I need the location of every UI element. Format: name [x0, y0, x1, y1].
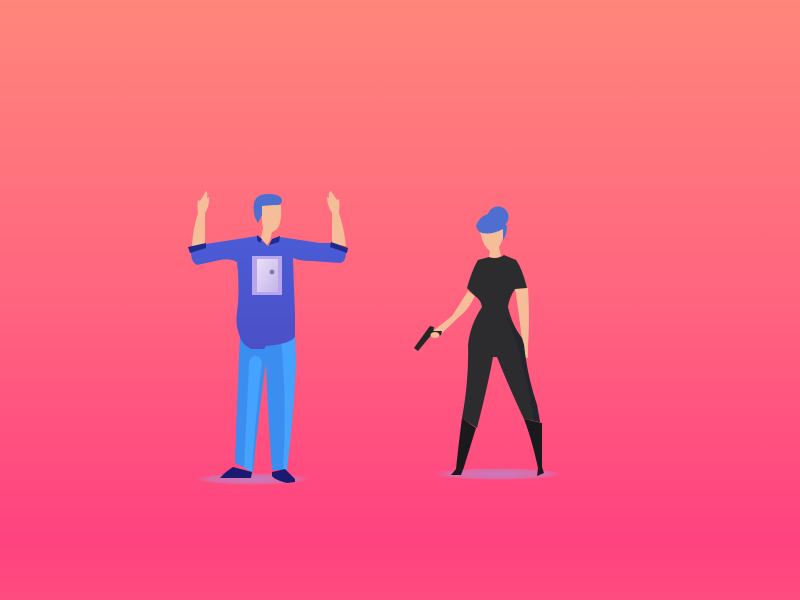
ground shadow: woman: [433, 468, 563, 480]
safe door: [257, 259, 278, 292]
safe on chest: [252, 256, 282, 295]
figure: man with raised hands: [188, 191, 348, 483]
pistol: [414, 326, 442, 351]
woman right arm and hand: [515, 288, 529, 358]
man shoes: [220, 467, 295, 483]
ground shadow: man: [195, 473, 311, 485]
woman hair: [476, 206, 508, 240]
man cuffs and collar: [188, 235, 348, 253]
woman bodysuit: [462, 255, 540, 428]
figure: woman with pistol: [414, 206, 544, 476]
man neck and face: [261, 205, 281, 245]
man arms and hands: [192, 191, 346, 246]
woman left arm: [433, 291, 475, 335]
woman neck and face: [480, 228, 504, 258]
man shirt: [191, 236, 346, 349]
safe dial: [270, 270, 274, 274]
man trousers: [235, 335, 296, 472]
man hair: [254, 194, 282, 223]
woman hip shading: [506, 315, 540, 422]
woman boots: [451, 418, 544, 476]
hand on pistol: [430, 332, 440, 338]
